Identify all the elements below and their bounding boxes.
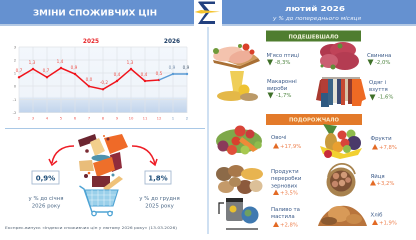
item: pork: Свинина <box>367 53 391 59</box>
item: bread <box>318 206 397 226</box>
x axis labels: 12 <box>157 116 162 120</box>
x axis labels: 10 <box>129 116 134 120</box>
data labels: 0,0 <box>86 77 93 82</box>
data labels: -0,2 <box>100 80 108 85</box>
item: eggs: +3,2% <box>376 181 394 187</box>
item: pasta: -1,7% <box>276 93 291 99</box>
item: vegetables: +17,9% <box>280 144 301 150</box>
y axis labels: 3 <box>14 44 17 50</box>
subheading: у % до попереднього місяця <box>272 16 361 22</box>
x axis labels: 7 <box>88 116 91 120</box>
header: title band <box>0 0 194 26</box>
y axis labels: -1 <box>13 97 17 102</box>
x axis labels: 3 <box>32 116 35 120</box>
item: poultry: М'ясо птиці <box>266 53 299 59</box>
year label 2026: 2026 <box>164 39 180 45</box>
data labels: 0,4 <box>141 72 148 77</box>
item: grain products: +3,5% <box>280 190 298 196</box>
data labels: 0,9 <box>169 65 176 70</box>
x axis labels: 5 <box>60 116 63 120</box>
data labels: 0,7 <box>43 68 50 73</box>
footer source note: Експрес-випуск «Індекси споживчих цін у лютому 2026 року» (13.03.2026) <box>5 226 178 230</box>
x axis labels: 2 <box>186 116 189 120</box>
item: clothing <box>316 78 393 107</box>
item: poultry <box>212 44 299 69</box>
item: clothing: -1,6% <box>378 94 393 100</box>
item: vegetables <box>216 126 301 155</box>
x axis labels: 8 <box>102 116 105 120</box>
date heading: лютий 2026 <box>285 4 345 13</box>
item: vegetables: Овочі <box>271 135 286 141</box>
x axis labels: 9 <box>116 116 119 120</box>
x axis labels: 4 <box>46 116 49 120</box>
item: pork: -2,0% <box>375 60 390 66</box>
item: bread: +1,9% <box>379 220 397 226</box>
x axis labels <box>18 116 189 120</box>
item: pasta <box>217 71 297 101</box>
callout: vs December: 2025 року <box>145 204 175 210</box>
item: pork <box>320 42 391 70</box>
item: grain products: переробки <box>271 176 302 182</box>
item: clothing: взуття <box>369 87 388 93</box>
item: fruits <box>320 124 397 159</box>
callout: vs January: 0,9% <box>36 174 55 182</box>
y axis labels: 2 <box>14 58 17 62</box>
callout: vs January: у % до січня <box>29 196 63 202</box>
blue line 2026 <box>159 73 188 80</box>
y axis labels: -2 <box>13 110 17 115</box>
data labels <box>16 59 190 85</box>
panel heading: cheaper: ПОДЕШЕВШАЛО <box>288 34 338 40</box>
red line 2025 <box>18 67 160 91</box>
item: bread: Хліб <box>370 212 383 218</box>
item: grain products <box>216 165 302 196</box>
callout: vs December <box>139 171 180 210</box>
item: fruits: Фрукти <box>370 136 392 142</box>
item: fuel: +2,8% <box>280 222 298 228</box>
y axis labels: 0 <box>14 84 17 88</box>
panel heading: cheaper <box>266 30 361 42</box>
arrow: right <box>132 146 157 165</box>
item: pasta: Макаронні <box>267 79 297 85</box>
x axis labels: 2 <box>18 116 21 120</box>
vertical divider <box>207 27 209 234</box>
x axis labels: 6 <box>74 116 77 120</box>
data labels: 0,7 <box>16 68 23 73</box>
arrow: left <box>49 146 74 165</box>
y axis labels <box>13 44 17 115</box>
y axis labels: 1 <box>14 70 17 76</box>
icon: shopping cart <box>80 186 118 216</box>
x axis labels: 1 <box>172 116 175 120</box>
callout: vs January <box>29 171 63 210</box>
callout: vs January: 2026 року <box>32 204 61 210</box>
item: eggs <box>326 164 394 196</box>
callout: vs December: 1,8% <box>148 174 168 182</box>
data labels: 1,3 <box>29 60 36 65</box>
icon: falling goods above shopping cart <box>78 134 128 216</box>
callout: vs December: у % до грудня <box>139 196 180 202</box>
year label 2025: 2025 <box>83 39 99 45</box>
data labels: 0,9 <box>71 65 78 70</box>
header: date band <box>222 0 416 26</box>
panel heading: more expensive <box>266 114 362 125</box>
item: grain products: зернових <box>271 184 298 190</box>
title: ЗМІНИ СПОЖИВЧИХ ЦІН <box>33 8 157 18</box>
item: clothing: Одяг і <box>369 80 386 86</box>
data labels: 1,3 <box>127 60 134 65</box>
item: fuel <box>219 198 300 229</box>
divider under chart <box>5 128 205 129</box>
item: fruits: +7,8% <box>379 145 397 151</box>
panel heading: more expensive: ПОДОРОЖЧАЛО <box>289 118 339 124</box>
data labels: 1,4 <box>57 59 64 64</box>
line chart: consumer price changes <box>13 39 190 120</box>
item: grain products: Продукти <box>271 169 299 175</box>
x axis labels: 11 <box>143 116 148 120</box>
data labels: 0,4 <box>114 72 121 77</box>
item: fuel: мастила <box>271 214 295 220</box>
logo: sigma <box>194 0 222 25</box>
item: pasta: вироби <box>267 86 288 92</box>
data labels: 0,9 <box>183 65 190 70</box>
item: fuel: Паливо та <box>271 207 300 213</box>
data labels: 0,5 <box>156 71 163 76</box>
item: eggs: Яйця <box>370 173 385 180</box>
item: poultry: -8,3% <box>275 60 290 66</box>
